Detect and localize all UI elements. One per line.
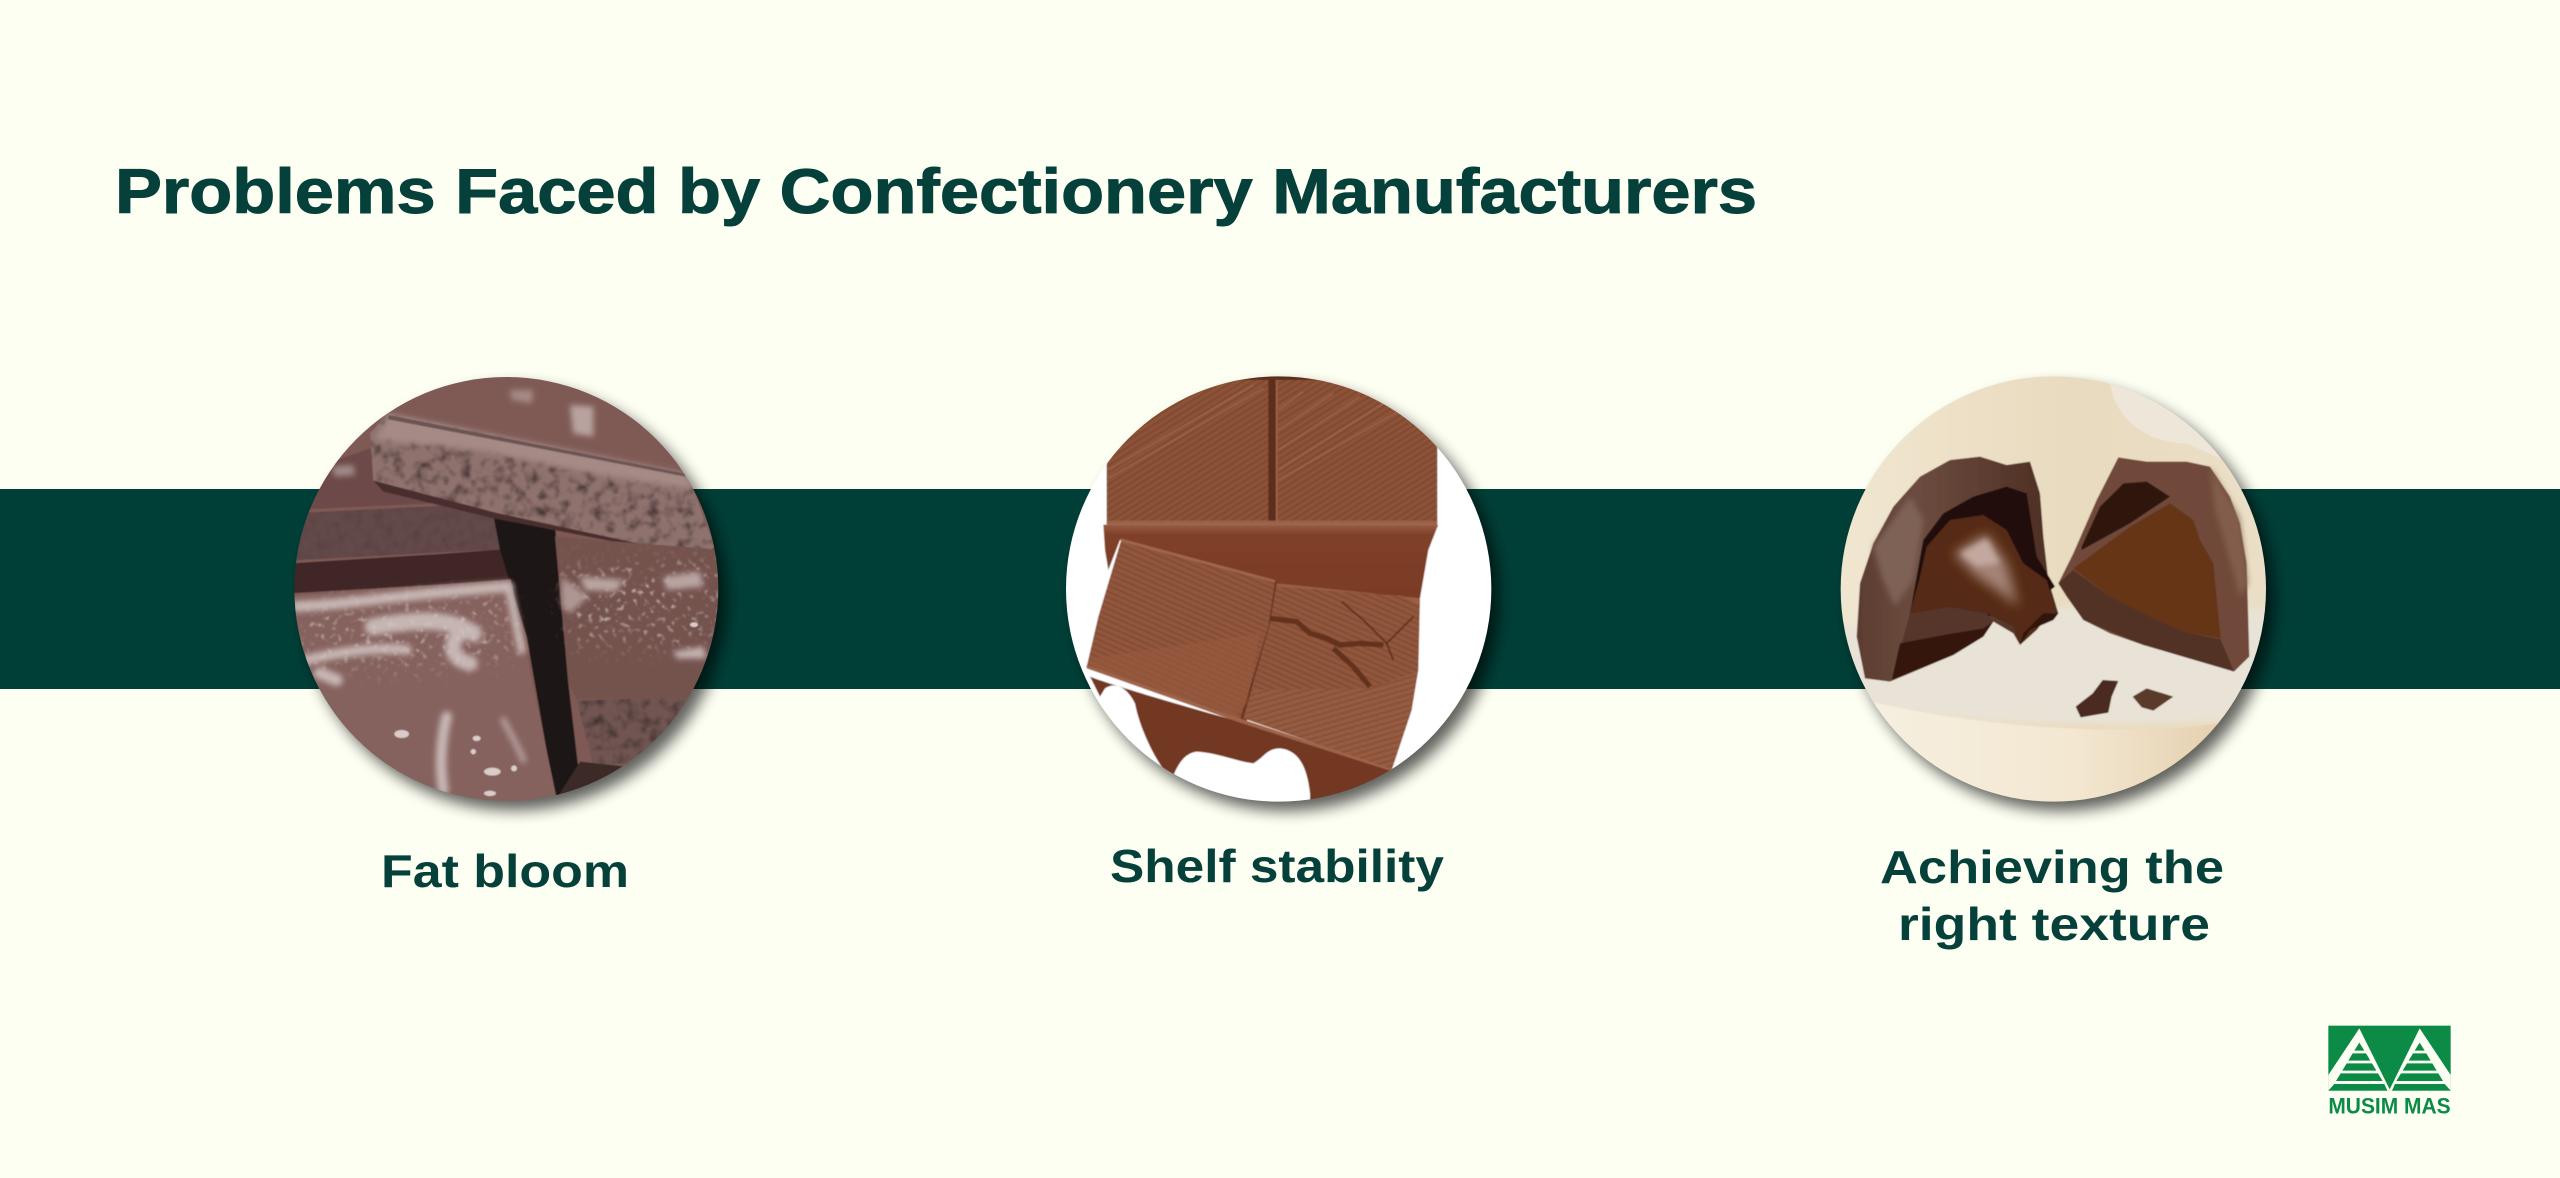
crumbs (2076, 680, 2173, 717)
dark green horizontal band (0, 489, 2560, 689)
label: achieving the right texture: right texture (1898, 898, 2210, 950)
right truffle half (2058, 457, 2249, 672)
label: shelf stability: Shelf stability (1110, 840, 1444, 892)
logo: Musim Mas (2328, 1026, 2451, 1118)
image circle: cut filled chocolate truffle for texture (1837, 370, 2277, 811)
label: fat bloom: Fat bloom (381, 845, 629, 897)
title: Problems Faced by Confectionery Manufacturers (115, 157, 1757, 227)
label: achieving the right texture: Achieving the (1880, 841, 2224, 893)
left truffle half (1857, 457, 2058, 682)
image circle: fat bloom chocolate (290, 373, 726, 810)
label: achieving the right texture (1880, 841, 2224, 950)
image circle: melting chocolate bar for shelf stability (1063, 370, 1499, 817)
logo: Musim Mas: MUSIM MAS (2328, 1093, 2451, 1118)
